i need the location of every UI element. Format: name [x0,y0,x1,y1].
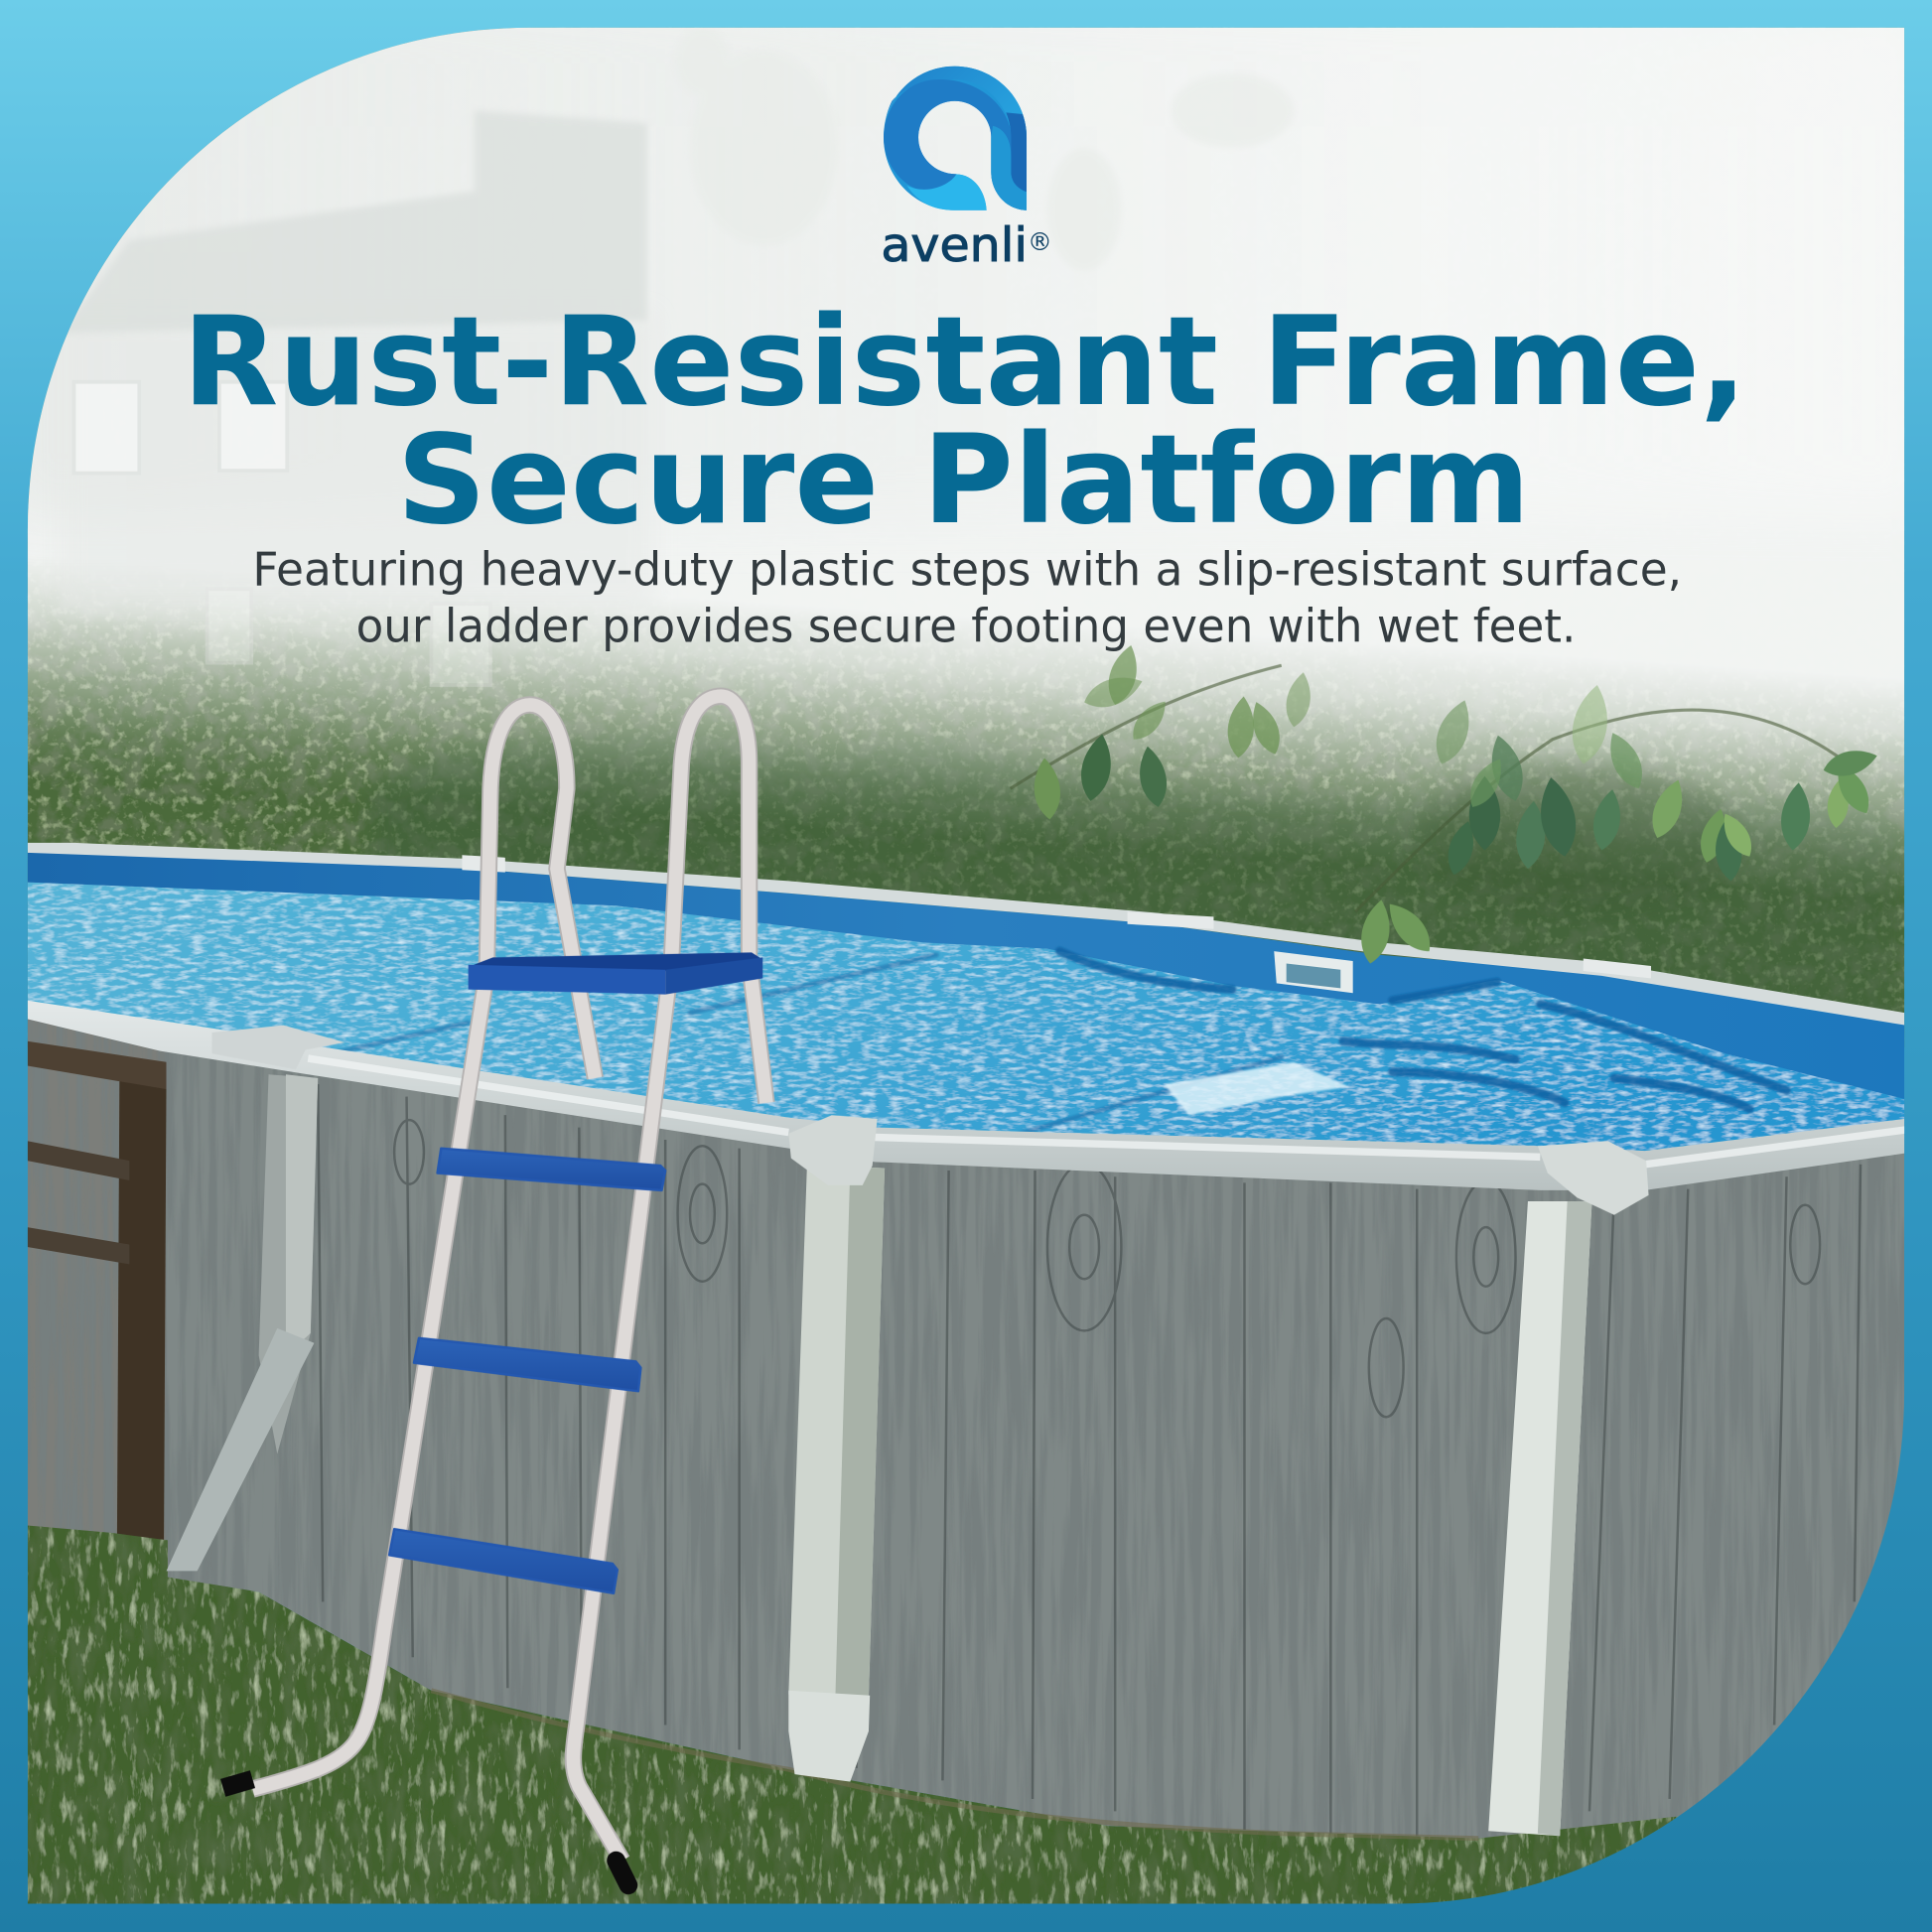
ladder rail right [573,696,766,1861]
wall plank lines and knots [318,1084,1861,1836]
ladder platform [469,952,762,995]
pool skimmer [1274,951,1353,993]
rim bracket right [1538,1141,1649,1215]
top tonal shading [28,28,512,502]
grass [27,1525,1725,1932]
shrubs and hedge [0,0,1932,1047]
grass soil line [431,1691,1478,1839]
ladder rail shadow right [573,696,766,1861]
dark foliage shade [1417,763,1737,911]
ladder rail left [252,705,595,1789]
fence [27,1011,167,1547]
overhanging tree branches [1011,642,1880,966]
back rim connectors [462,855,1651,978]
logo wordmark: avenli [881,218,1028,273]
water dark ripples [338,946,1791,1132]
branch stems [1011,665,1849,911]
brand logo [881,67,1052,273]
logo mark [884,67,1027,210]
faint house body [64,332,69,342]
subtitle: Featuring heavy-duty plastic steps with a slip-resistant surface, [252,543,1682,597]
registered mark: ® [1028,227,1052,256]
back rim [27,843,1905,1026]
front rim [27,1001,1905,1190]
pool liner back wall [27,850,1905,1109]
pool water solar cover [27,883,1905,1165]
wall post left with brace [167,1074,318,1571]
ladder foot right [617,1861,628,1885]
faint house roof [62,111,647,333]
water white reflection [1165,1062,1349,1115]
ladder step 2 [438,1149,665,1190]
rim bracket center [788,1115,878,1185]
ladder [223,696,766,1885]
wall post center [788,1165,885,1782]
front rim highlight [308,1058,1905,1165]
ladder foot left [223,1779,252,1788]
faint tree upper [675,27,1294,271]
darker front hedge [369,732,1905,1035]
title: Rust-Resistant Frame, [183,291,1747,434]
leaves left cluster [1032,642,1314,820]
faint house windows [73,382,490,685]
white haze fade [28,28,1904,888]
title: Secure Platform [397,409,1530,552]
leaves right cluster [1357,682,1880,966]
subtitle: our ladder provides secure footing even with wet feet. [356,600,1576,653]
ladder step 4 [389,1529,618,1593]
pool wood-print wall [167,1047,1905,1839]
ladder step 3 [414,1338,640,1391]
ladder rail shadow left [252,705,595,1789]
wall post right [1488,1201,1591,1836]
rim bracket left [211,1026,345,1069]
